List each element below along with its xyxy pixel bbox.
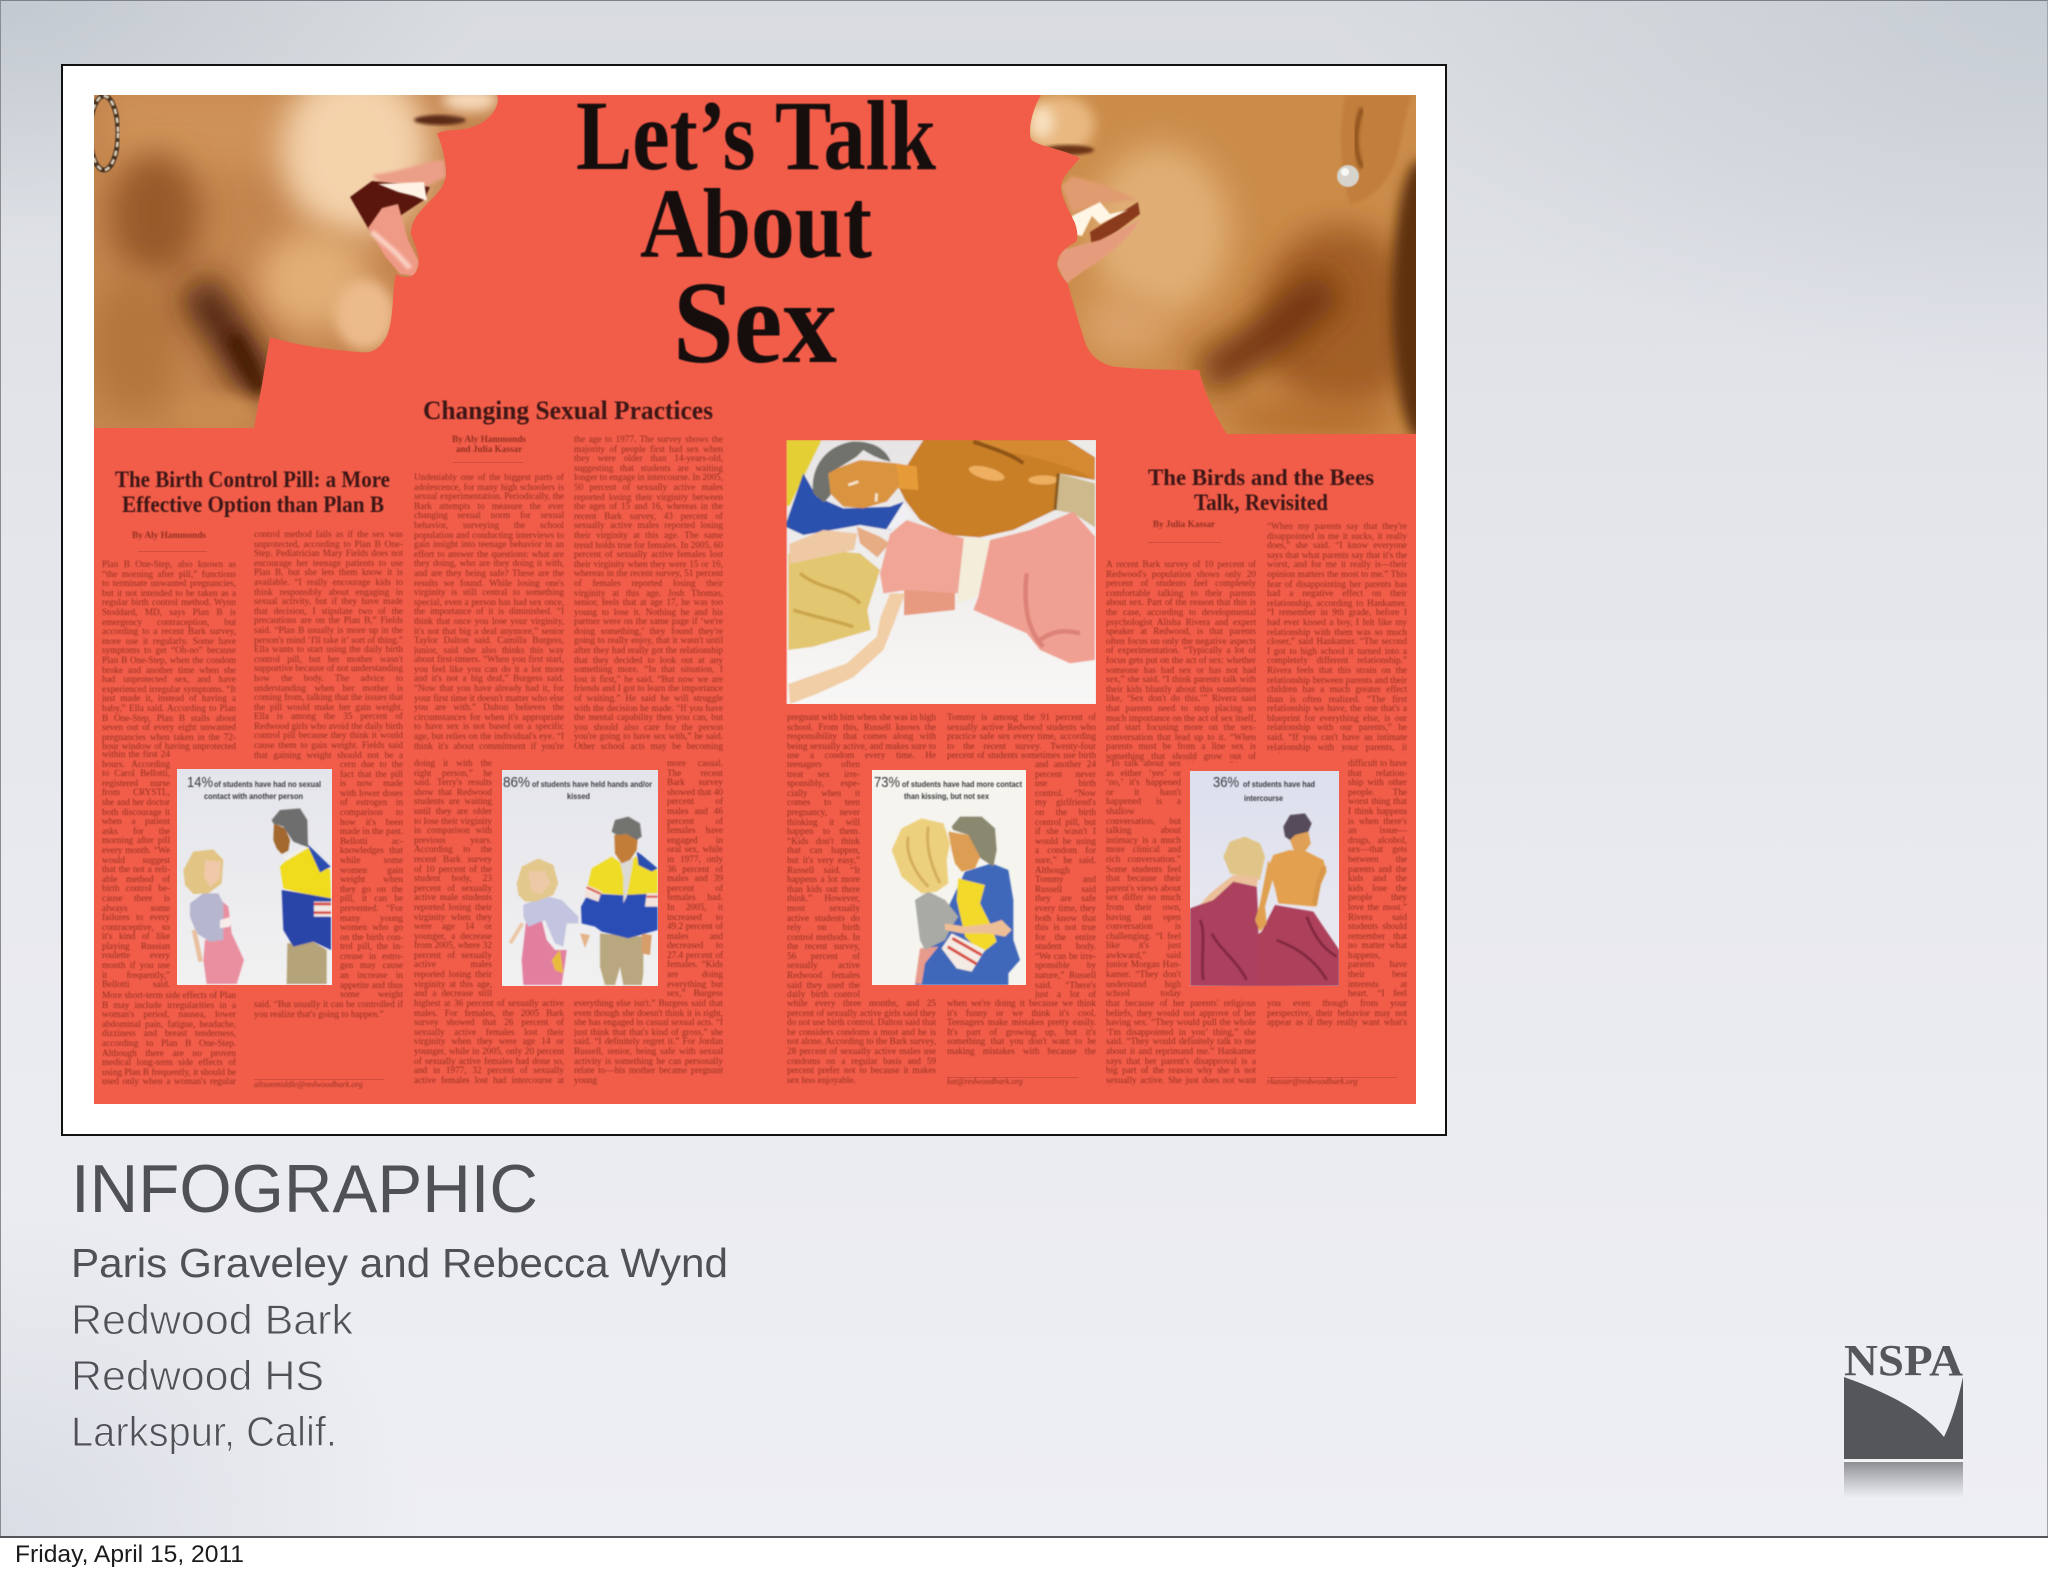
stat label: 36%: intercourse [1244,793,1283,803]
byline: main article: and Julia Kassar [456,444,522,454]
stat label: 36% [1213,774,1315,803]
credit: location: Larkspur, Calif. [71,1408,337,1455]
stat label: 36%: of students have had [1243,779,1315,789]
column 3 lower text: highest at 36 percent of sexually active males. For females, the 2005 Bark survey showed that 26 percent of sexually active females lost their virginity when they were age 14 or younger, while in 2005, only 20 percent of sexually active females had done so, and in 1977, 32 percent of sexually active females lost had intercourse at [414,999,564,1085]
icon: stud earring [1337,165,1359,187]
stat label: 14%: contact with another person [204,791,303,801]
column 4 upper text: the age to 1977. The survey shows the majority of people first had sex when they were older than 14-years-old, suggesting that students are waiting longer to engage in intercourse. In 2005, 50 percent of sexually active males reported losing their virginity between the ages of 15 and 16, whereas in the recent Bark survey, 43 percent of sexually active males reported losing their virginity at this age. The same trend holds true for females. In 2005, 60 percent of sexually active females lost their virginity when they were 15 or 16, whereas in the recent survey, 51 percent of females reported losing their virginity at this age. Josh Thomas, senior, feels that at age 17, he was too young to lose it. Nothing he and his partner were on the same page if ‘we're doing something,’ they found they're going to really enjoy, that it wasn't until after they had really got the relationship that they decided to look out at any something more. “In that situation, I lost it first,” he said. “But now we are friends and I got to learn the importance of waiting.” He said he will struggle with the decision he made. “If you have the mental capability then you can, but you should also care for the person you're going to have sex with,” he said. Other school acts may be becoming [574,435,723,751]
footer date strip [0,1536,2048,1576]
headline: Sex [673,257,837,388]
icon: NSPA logo [1844,1336,1963,1498]
title: INFOGRAPHIC: INFOGRAPHIC [71,1151,538,1227]
subheading: birds and bees article: The Birds and the Bees [1148,465,1374,490]
framed magazine spread [61,64,1447,1136]
icon: NSPA logo: NSPA [1844,1336,1963,1385]
subheading: Changing Sexual Practices: Changing Sexual Practices [423,396,713,425]
column 5 lower text: while every three months, and 25 percent of sexually active girls said they do not use birth control. Dalton said that he considers condoms a must and he is not alone. According to the Bark survey, 28 percent of sexually active males use condoms on a regular basis and 59 percent prefer not to because it makes sex less enjoyable. [787,999,936,1085]
column 4 lower text: everything else isn't.” Burgess said that even though she doesn't think it is right, she has engaged in casual sexual acts. “I just think that that's kind of gross,” she said. “I definitely regret it.” For Jordan Russell, senior, being safe with sexual activity is something he can personally relate to—his mother became pregnant young [574,999,723,1085]
stat label: 73%: 73% [874,774,900,791]
subheading: birds and bees article [1148,465,1374,515]
photo: 86% statistic with dolls holding hands [502,770,658,986]
photo: left face in profile [94,95,498,428]
stat label: 86%: 86% [503,774,530,791]
stat label: 73% [874,774,1022,801]
stat label: 36%: 36% [1213,774,1239,791]
column 3 upper text: Undeniably one of the biggest parts of adolescence, for many high schoolers is sexual experimentation. Periodically, the Bark attempts to measure the ever changing sexual norm for sexual behavior, surveying the school population and conducting interviews to gain insight into teenage behavior in an effort to answer the questions: what are they doing, who are they doing it with, and are they being safe? These are the results we found. While losing one's virginity is still central to something special, even a person has had sex once, the importance of it is diminished. “I think that once you lose your virginity, it's not that big a deal anymore,” senior Taylor Dalton said. Camilla Burgess, junior, said she also thinks this way about first-timers. “When you first start, you feel like you can do it a lot more and it's not a big deal,” Burgess said. “Now that you have already had it, for your first time it doesn't matter who else you are with.” Dalton believes the circumstances for when it's appropriate to have sex is not based on a specific age, but relies on the individual's eye. “I think it's about commitment if you're [414,473,564,751]
author email: column 6: kat@redwoodbark.org [947,1077,1023,1086]
stat label: 86% [502,776,652,800]
credit: staff names: Paris Graveley and Rebecca Wynd [71,1240,728,1286]
photo: right face in profile [1030,95,1416,434]
byline: main article [452,435,526,454]
photo: dolls lying together [787,439,1097,705]
subheading: birth control article: The Birth Control Pill: a More [115,467,390,492]
subheading: birds and bees article: Talk, Revisited [1194,490,1328,515]
stat label: 14% [187,774,321,801]
panel: red magazine spread [94,95,1416,1104]
photo: 14% statistic with dolls standing apart [177,769,332,986]
credit: publication: Redwood Bark [71,1296,354,1343]
date stamp: Friday, April 15, 2011 [15,1541,244,1568]
photo: 73% statistic with dolls embracing [872,770,1026,985]
stat label: 14%: 14% [187,774,213,791]
column 1 text beside photo: within the first 24 hours. Accord­ing to Carol Bel­lotti, regis­tered nurse from CRYSTL, she and her doc­tor both dis­courage it when a patient asks for the morning after pill every month. “We would sug­gest that the not a reli­able method of birth control be­cause there is always some failures to every contra­ceptive, so it's kind of like play­ing Russian roulette every month if you use it frequently,” Bellotti said. [102,750,170,989]
stat label: 73%: of students have had more contact [902,779,1022,789]
stat label: 73%: than kissing, but not sex [904,791,989,801]
photo: 36% statistic with dolls under a sheet [1190,771,1339,987]
subheading: birth control article [115,467,390,517]
headline [576,80,936,388]
headline: About [640,168,872,279]
stat label: 86%: kissed [567,791,590,801]
author email: column 2: alisonmiddle@redwoodbark.org [254,1080,363,1089]
subheading: birth control article: Effective Option than Plan B [122,492,384,517]
stat label: 86%: of students have held hands and/or [532,779,653,789]
author email: column 8: rkassar@redwoodbark.org [1267,1077,1358,1086]
credit: school: Redwood HS [71,1352,324,1399]
stat label: 14%: of students have had no sexual [214,779,321,789]
icon: hoop earring [90,96,118,170]
